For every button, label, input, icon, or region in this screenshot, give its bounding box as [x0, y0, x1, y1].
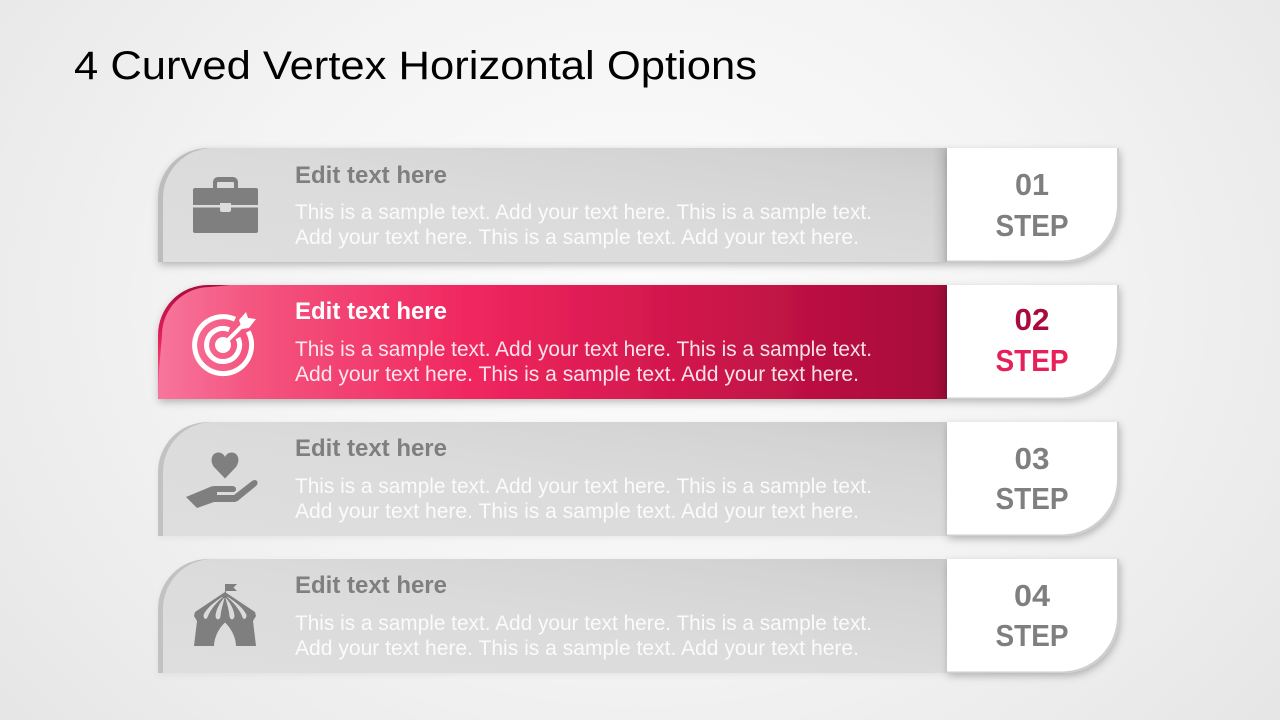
- body text 02: This is a sample text. Add your text here. This is a sample text.: [295, 338, 872, 361]
- icon: hand holding heart: [186, 452, 258, 508]
- panel: option 03: [158, 422, 1119, 536]
- bar 04: [158, 559, 947, 673]
- body text 04: This is a sample text. Add your text here. This is a sample text.: [295, 612, 872, 635]
- bar 02: [158, 285, 947, 399]
- body text 04: Add your text here. This is a sample text. Add your text here.: [295, 637, 859, 660]
- step tab 01: STEP: [996, 208, 1068, 243]
- panel: option 04: [158, 559, 1119, 673]
- body text 02: Add your text here. This is a sample text. Add your text here.: [295, 363, 859, 386]
- body text 03: [295, 475, 872, 523]
- body text 01: This is a sample text. Add your text here. This is a sample text.: [295, 201, 872, 224]
- step tab 04: 04: [1014, 578, 1051, 613]
- title: 4 Curved Vertex Horizontal Options: [74, 44, 757, 88]
- icon: circus tent: [194, 584, 256, 646]
- step tab 02: 02: [1014, 302, 1050, 337]
- bar 01: [158, 148, 947, 262]
- step tab 03: 03: [1014, 441, 1050, 476]
- heading 01: Edit text here: [295, 162, 447, 189]
- panel: option 01: [158, 148, 1119, 262]
- icon: target with arrow: [195, 312, 256, 374]
- body text 03: Add your text here. This is a sample text. Add your text here.: [295, 500, 859, 523]
- body text 04: [295, 612, 872, 660]
- step tab 03: [947, 422, 1119, 536]
- body text 01: [295, 201, 872, 249]
- step tab 04: STEP: [996, 618, 1068, 653]
- heading 04: Edit text here: [295, 572, 447, 599]
- body text 02: [295, 338, 872, 386]
- body text 03: This is a sample text. Add your text here. This is a sample text.: [295, 475, 872, 498]
- icon: briefcase: [193, 177, 258, 233]
- body text 01: Add your text here. This is a sample text. Add your text here.: [295, 226, 859, 249]
- step tab 04: [947, 559, 1119, 673]
- panel: option 02 (highlighted): [158, 285, 1119, 399]
- step tab 02: STEP: [996, 343, 1068, 378]
- heading 02: Edit text here: [295, 298, 447, 325]
- step tab 02: [947, 285, 1119, 399]
- step tab 03: STEP: [996, 481, 1068, 516]
- step tab 01: [947, 148, 1119, 262]
- heading 03: Edit text here: [295, 435, 447, 462]
- step tab 01: 01: [1015, 167, 1049, 202]
- bar 03: [158, 422, 947, 536]
